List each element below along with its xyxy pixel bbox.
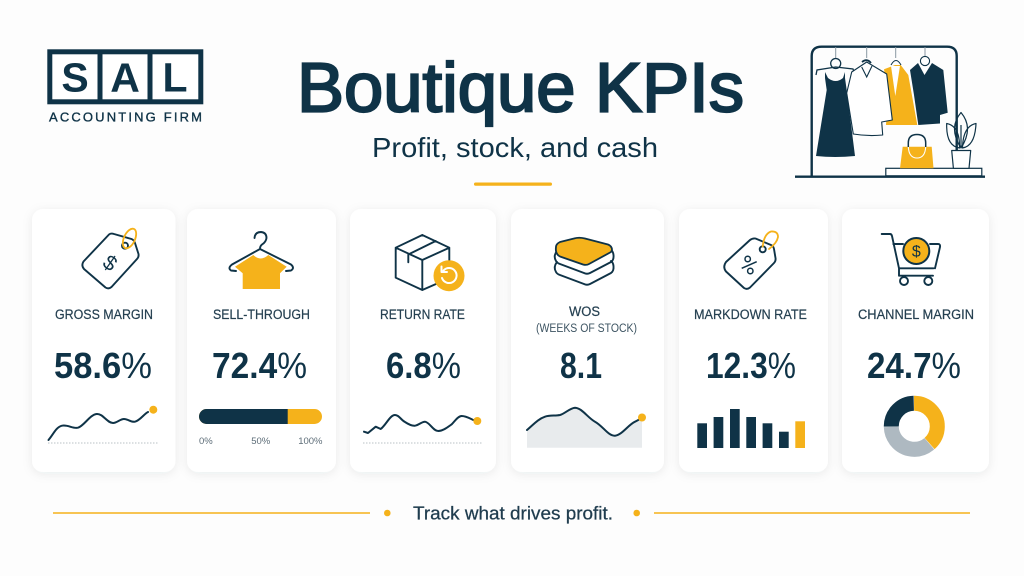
donut chart [882,394,947,459]
icon: cart with dollar coin: $ [912,244,921,260]
logo: SAL Accounting Firm: A [110,54,140,100]
icon: percent price tag [724,231,778,289]
panel: channel margin [842,209,989,472]
logo: SAL Accounting Firm: L [162,54,188,100]
label: GROSS MARGIN [55,307,153,322]
label: SELL-THROUGH [213,307,310,322]
dress [816,58,855,157]
progress bar: 100% [298,436,323,447]
white shirt [847,60,892,136]
bar chart [697,409,805,448]
footer tagline: Track what drives profit. [413,504,613,524]
icon: dollar price tag [82,227,139,288]
logo: SAL Accounting Firm [49,50,202,124]
potted plant [947,112,976,168]
sparkline [48,406,158,443]
rack frame [795,47,985,177]
panel: sell-through [187,209,336,472]
icon: dollar price tag: $ [98,251,121,276]
value: 24.7% [867,345,961,386]
footer tagline [53,504,970,524]
label: WOS [569,304,600,319]
panel: return rate [350,209,496,472]
title underline accent [474,182,552,186]
value: 72.4% [212,345,307,386]
value: 12.3% [706,345,796,386]
icon: folded clothes stack [555,238,614,285]
navy jacket [910,56,948,125]
logo: SAL Accounting Firm: S [61,54,89,100]
label: CHANNEL MARGIN [858,307,974,322]
progress bar: 0% [199,436,213,447]
illustration: clothing rack [795,47,985,177]
shelf [886,168,982,176]
panel: weeks of stock [511,209,664,472]
icon: box with return arrow [396,235,464,291]
handbag [900,134,934,168]
panel: markdown rate [679,209,828,472]
title: Boutique KPIs [297,48,744,126]
value: 6.8% [386,345,461,386]
logo: SAL Accounting Firm: ACCOUNTING FIRM [49,110,202,124]
sub-label: (WEEKS OF STOCK) [536,323,637,335]
yellow jacket [884,60,917,125]
value: 8.1 [560,345,602,386]
subtitle: Profit, stock, and cash [372,132,658,163]
label: RETURN RATE [380,307,465,322]
area chart [527,408,646,448]
progress bar: 50% [251,436,271,447]
panel: gross margin [32,209,176,472]
progress bar [199,409,323,447]
icon: hanger with shirt [229,232,293,289]
value: 58.6% [54,345,152,386]
label: MARKDOWN RATE [694,307,807,322]
icon: cart with dollar coin [882,234,940,285]
sparkline [363,415,482,443]
